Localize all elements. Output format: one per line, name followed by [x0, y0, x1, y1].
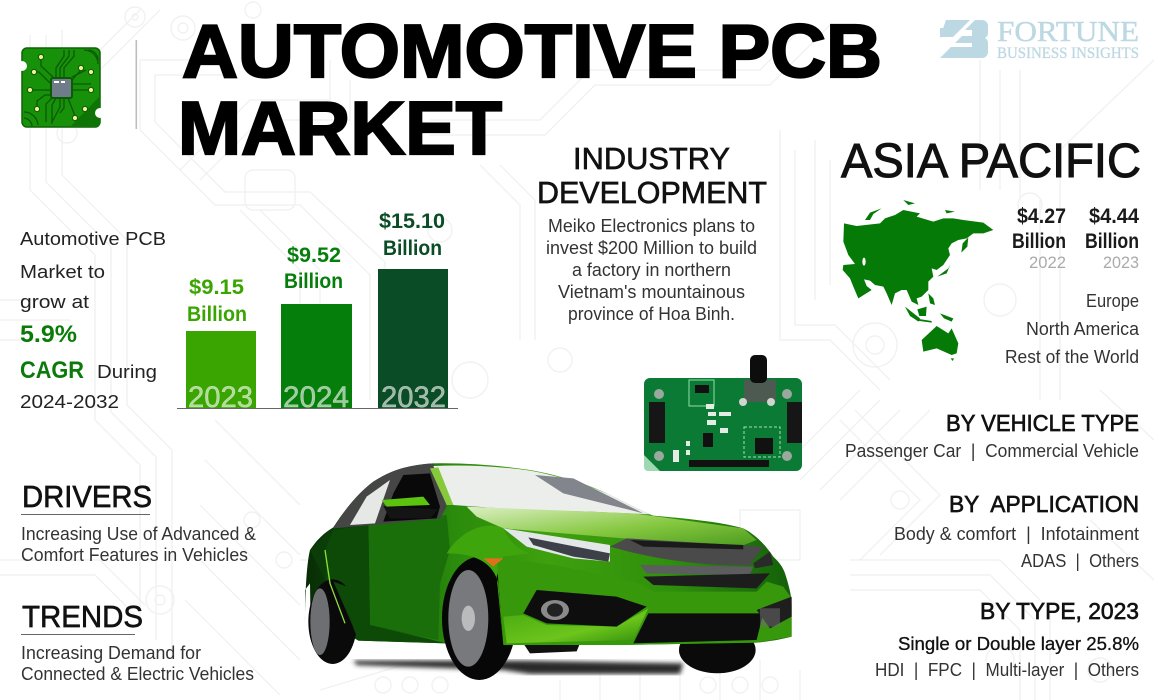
segment: by vehicle type: Passenger Car | Commercial Vehicle	[845, 441, 1139, 461]
industry development text: Meiko Electronics plans to	[548, 216, 755, 236]
growth text block: Automotive PCB	[20, 229, 166, 249]
segment: by application	[894, 491, 1139, 571]
asia pacific heading: ASIA PACIFIC	[841, 135, 1141, 188]
title: AUTOMOTIVE PCB	[182, 9, 882, 93]
other regions list: North America	[1026, 319, 1140, 339]
title: MARKET	[178, 86, 502, 170]
bar: 2024: $9.52	[287, 244, 341, 267]
trends block: Connected & Electric Vehicles	[21, 664, 254, 684]
other regions list: Rest of the World	[1005, 347, 1139, 367]
bar: 2023	[186, 276, 256, 414]
title	[178, 9, 882, 170]
bar: 2032: 2032	[381, 381, 446, 414]
industry development heading: DEVELOPMENT	[537, 175, 767, 210]
segment: by application: BY APPLICATION	[949, 491, 1139, 517]
segment: by type: HDI | FPC | Multi-layer | Others	[875, 660, 1139, 680]
industry development heading	[537, 141, 767, 210]
trends block: TRENDS	[22, 600, 143, 634]
other regions list: Europe	[1086, 291, 1139, 311]
industry development text: province of Hoa Binh.	[568, 304, 735, 324]
value: 2022: Billion	[1012, 230, 1066, 253]
value: 2023: $4.44	[1089, 205, 1139, 228]
segment: by type: Single or Double layer 25.8%	[898, 634, 1139, 654]
bar: 2023: $9.15	[189, 276, 244, 299]
growth text block: 2024-2032	[20, 392, 119, 412]
drivers block: DRIVERS	[22, 480, 152, 514]
industry development text: invest $200 Million to build	[546, 238, 757, 258]
bar: 2024	[281, 244, 352, 414]
image: green car	[305, 463, 792, 680]
bar: 2032	[378, 210, 448, 414]
image: green circuit board	[644, 355, 802, 471]
bar chart: market size	[177, 210, 458, 414]
drivers block	[21, 480, 256, 565]
trends block	[21, 600, 254, 684]
industry development heading: INDUSTRY	[573, 141, 730, 176]
growth text block: CAGR	[20, 357, 84, 384]
bar: 2032: Billion	[383, 237, 442, 260]
industry development text: Vietnam's mountainous	[558, 282, 745, 302]
bar: 2024: Billion	[284, 270, 343, 293]
icon: circuit board chip	[17, 48, 105, 127]
drivers block: Increasing Use of Advanced &	[21, 524, 256, 544]
other regions list	[1005, 291, 1140, 367]
segment: by application: Body & comfort | Infotainment	[894, 524, 1139, 544]
bar: 2032: $15.10	[379, 210, 445, 233]
segment: by vehicle type	[845, 410, 1139, 461]
asia pacific values	[1012, 205, 1139, 272]
logo: Fortune Business Insights: BUSINESS INSIGHTS	[997, 45, 1139, 62]
growth text block: grow at	[20, 292, 89, 312]
value: 2023: Billion	[1085, 230, 1139, 253]
industry development text: a factory in northern	[572, 260, 731, 280]
logo: Fortune Business Insights: FORTUNE	[997, 17, 1139, 48]
bar: 2023: Billion	[187, 303, 247, 326]
value: 2022	[1012, 205, 1066, 272]
value: 2023: 2023	[1103, 253, 1139, 272]
growth text block: During	[97, 362, 157, 382]
bar: 2024: 2024	[283, 381, 349, 414]
value: 2022: 2022	[1029, 253, 1066, 272]
bar: 2023: 2023	[188, 381, 253, 414]
growth text block: 5.9%	[20, 321, 77, 348]
value: 2023	[1085, 205, 1139, 272]
map: Asia Pacific	[843, 200, 993, 361]
segment: by type: BY TYPE, 2023	[980, 598, 1139, 624]
drivers block: Comfort Features in Vehicles	[21, 545, 248, 565]
segment: by application: ADAS | Others	[1021, 551, 1139, 571]
segment: by vehicle type: BY VEHICLE TYPE	[946, 410, 1139, 436]
segment: by type	[875, 598, 1139, 680]
trends block: Increasing Demand for	[21, 643, 201, 663]
industry development text	[546, 216, 757, 324]
value: 2022: $4.27	[1017, 205, 1066, 228]
growth text block: Market to	[20, 262, 105, 282]
growth text block	[20, 229, 166, 412]
logo: Fortune Business Insights	[940, 17, 1139, 62]
